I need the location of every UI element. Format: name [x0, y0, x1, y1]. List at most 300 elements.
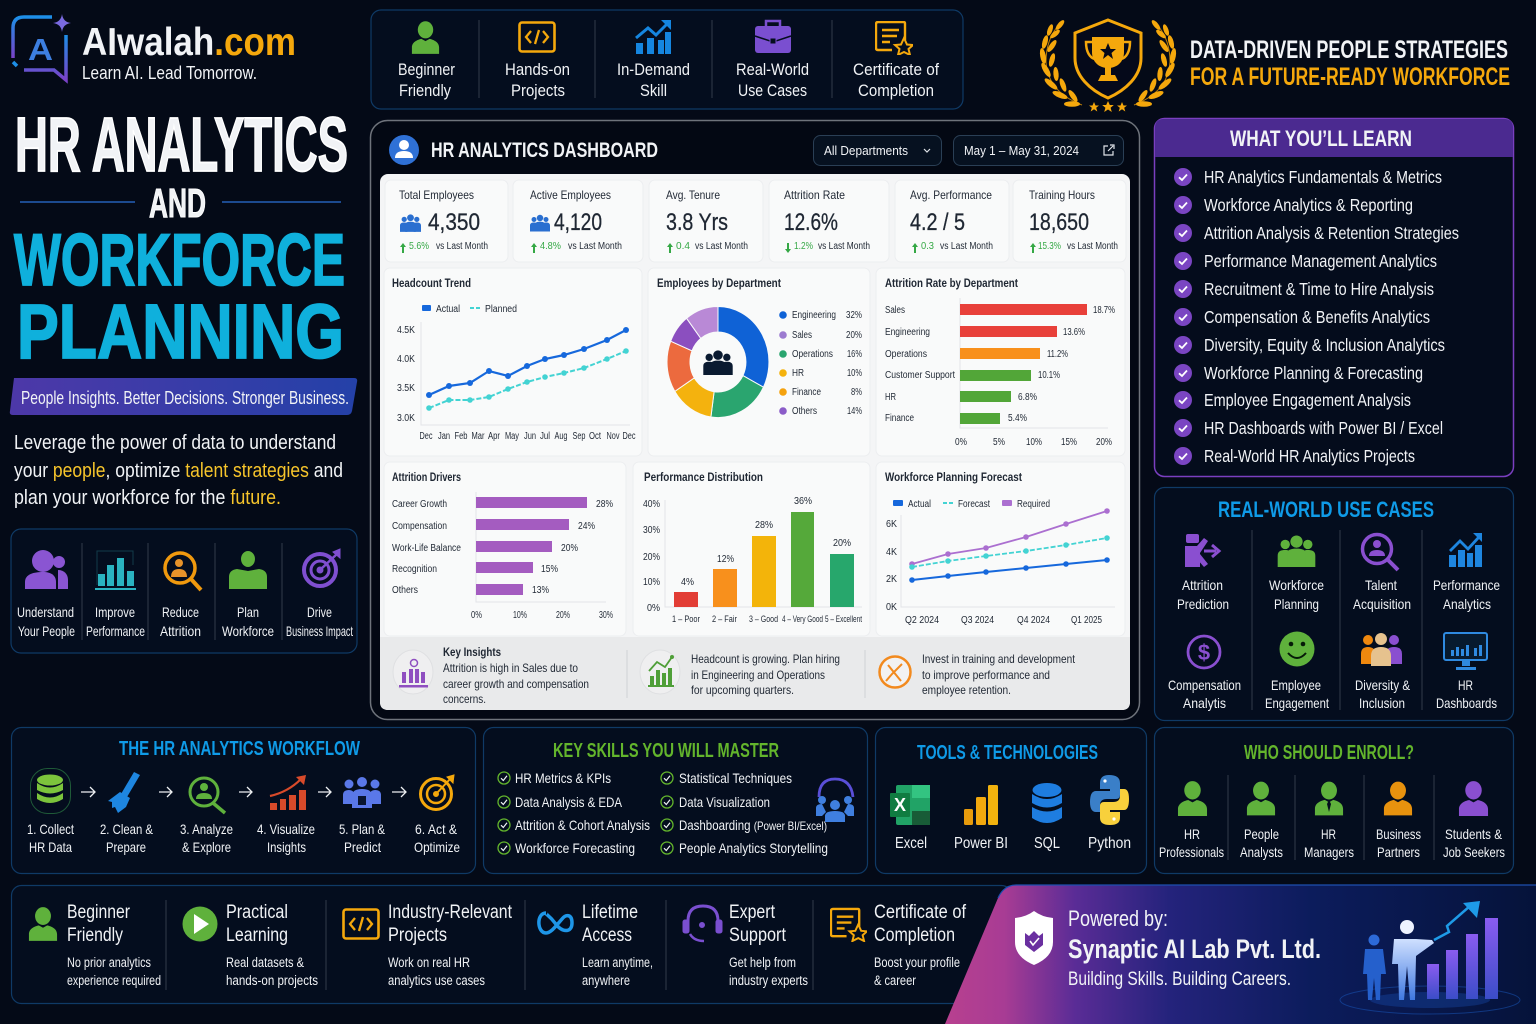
labels: Excel	[895, 835, 927, 852]
icon: logo chat bracket: A	[28, 32, 53, 67]
icon: act target	[420, 775, 454, 810]
labels: Business	[1376, 826, 1421, 842]
chart: attrition drivers: 20%	[556, 610, 570, 621]
KPI: attrition rate: Attrition Rate	[784, 188, 845, 202]
chart: performance distribution: 28%	[755, 520, 773, 531]
chart: headcount trend	[384, 268, 642, 456]
benefit text: Beginner	[67, 902, 131, 923]
labels: 6. Act &	[415, 821, 458, 837]
chart: workforce planning forecast: Q1 2025	[1071, 615, 1102, 626]
icon: trophy	[1086, 37, 1130, 81]
chart: performance distribution: 20%	[643, 552, 660, 563]
chart: headcount trend: Planned	[485, 304, 517, 315]
skill list: Attrition & Cohort Analysis	[515, 817, 650, 833]
labels: Prepare	[106, 839, 146, 855]
chart: attrition drivers: 10%	[513, 610, 527, 621]
banner: powered by: Building Skills. Building Careers.	[1068, 969, 1291, 990]
labels: Power BI	[954, 835, 1008, 852]
KPI: training hours: Training Hours	[1029, 188, 1095, 202]
chart: employees by department: 14%	[847, 406, 862, 417]
icon: plan team	[343, 777, 381, 808]
insight text: headcount: in Engineering and Operations	[691, 668, 825, 682]
icon: certificate	[876, 22, 913, 55]
icon: certificate	[831, 909, 867, 941]
labels: Diversity &	[1355, 677, 1411, 693]
chart: employees by department: Sales	[792, 330, 812, 341]
labels: Acquisition	[1353, 596, 1411, 612]
icon: students	[1459, 781, 1488, 816]
benefit text: Support	[729, 925, 787, 946]
icon: talent search	[1362, 534, 1398, 570]
chart: workforce planning forecast: 6K	[886, 519, 897, 530]
icon: broom	[108, 772, 140, 813]
icon: logo chat bracket	[13, 14, 71, 80]
chart: headcount trend: Sep	[572, 431, 586, 442]
KPI: attrition rate: 1.2%	[794, 240, 813, 252]
chart: headcount trend: Jul	[540, 431, 550, 442]
chart: performance distribution: 30%	[643, 525, 660, 536]
panel: who should enroll	[1154, 728, 1514, 874]
icon: business partners	[1384, 782, 1412, 815]
icon: performance chart	[1449, 533, 1482, 567]
chart: attrition rate by department: 5%	[993, 437, 1005, 448]
icon: beginner	[29, 907, 57, 941]
benefit text: Work on real HR	[388, 955, 470, 970]
KPI: average performance: 0.3	[921, 240, 934, 252]
chart: attrition rate by department: 13.6%	[1063, 327, 1085, 338]
KPI: active employees: vs Last Month	[568, 241, 622, 252]
insight text: headcount	[691, 652, 840, 697]
labels: 2. Clean &	[100, 821, 154, 837]
KPI: average performance: 4.2 / 5	[910, 209, 965, 236]
chart: attrition rate by department: 10%	[1026, 437, 1042, 448]
labels: In-Demand	[617, 60, 690, 79]
company text: Powered by:	[1068, 906, 1168, 931]
benefit text: Boost your profile	[874, 955, 960, 970]
chart: headcount trend: Feb	[454, 431, 468, 442]
heading: REAL-WORLD USE CASES	[1218, 497, 1434, 522]
skill list: People Analytics Storytelling	[679, 840, 828, 856]
chart: headcount trend: Aug	[554, 431, 568, 442]
skill checks	[498, 772, 673, 854]
skill list: Dashboarding (Power BI/Excel)	[679, 817, 827, 833]
labels	[398, 60, 939, 100]
skill list: Data Visualization	[679, 794, 770, 810]
chart: attrition drivers: 30%	[599, 610, 613, 621]
department filter	[814, 136, 942, 166]
brand name: AIwalah.com	[82, 21, 296, 64]
insight text: headcount: for upcoming quarters.	[691, 683, 794, 697]
icon: HR managers	[1315, 782, 1343, 815]
chart: workforce planning forecast: Q3 2024	[961, 615, 994, 626]
chart: employees by department	[648, 268, 870, 456]
checklist: Performance Management Analytics	[1204, 251, 1437, 271]
labels: Analysts	[1240, 844, 1283, 860]
heading: KEY SKILLS YOU WILL MASTER	[553, 740, 779, 762]
logo: AIwalah.com	[13, 14, 296, 83]
panel: course features	[371, 10, 963, 109]
panel: key skills	[484, 728, 868, 874]
labels: Engagement	[1265, 695, 1329, 711]
labels: Certificate of	[853, 60, 939, 79]
benefit text: experience required	[67, 973, 161, 988]
checklist: Attrition Analysis & Retention Strategies	[1204, 223, 1459, 243]
tagline: Learn AI. Lead Tomorrow.	[82, 63, 257, 83]
chart: headcount trend: Headcount Trend	[392, 276, 471, 290]
chart: performance distribution: 2 – Fair	[712, 614, 737, 624]
labels: Business Impact	[286, 623, 353, 639]
heading: TOOLS & TECHNOLOGIES	[917, 742, 1098, 764]
chart: attrition rate by department: 6.8%	[1018, 392, 1037, 403]
icon: briefcase	[755, 21, 791, 53]
icon: Python	[1090, 775, 1129, 825]
icon: people	[25, 550, 68, 589]
chart: employees by department: Operations	[792, 349, 833, 360]
chart: headcount trend: 4.5K	[397, 325, 415, 336]
chart: attrition drivers: 13%	[532, 585, 549, 596]
KPI: total employees: vs Last Month	[436, 241, 488, 252]
heading: THE HR ANALYTICS WORKFLOW	[119, 738, 360, 760]
panel: what you'll learn	[1154, 118, 1514, 476]
benefit text: Get help from	[729, 955, 796, 970]
icon: dashboard avatar	[389, 135, 419, 165]
icon: HR professionals	[1178, 781, 1207, 816]
icon: bar chart	[95, 551, 136, 590]
chart: performance distribution: 1 – Poor	[672, 614, 700, 624]
chart: attrition rate by department: 18.7%	[1093, 305, 1115, 316]
tagline banner: People Insights. Better Decisions. Stronger Business.	[21, 388, 349, 408]
labels: HR	[1458, 677, 1473, 693]
icon: right wreath	[1134, 19, 1177, 107]
intro paragraph: your people, optimize talent strategies and	[14, 460, 343, 482]
chart: attrition drivers: Recognition	[392, 564, 437, 575]
icon: workforce team	[1278, 535, 1315, 567]
date filter	[954, 136, 1124, 166]
icon: compensation: $	[1198, 640, 1210, 665]
benefit text: Learn anytime,	[582, 955, 653, 970]
icon: people analysts	[1247, 782, 1275, 815]
benefit text: Lifetime	[582, 902, 638, 923]
skill list: Workforce Forecasting	[515, 840, 635, 856]
panel: tools and technologies	[876, 728, 1146, 874]
chart: employees by department: Others	[792, 406, 817, 417]
icon: HR dashboard monitor	[1444, 633, 1487, 670]
title: WORKFORCE	[14, 220, 345, 301]
chart: workforce planning forecast: Required	[1017, 499, 1050, 510]
benefit text: Learning	[226, 925, 288, 946]
panel: real-world use cases	[1154, 488, 1514, 720]
KPI: average tenure: vs Last Month	[695, 241, 748, 252]
KPI: attrition rate: 12.6%	[784, 209, 838, 236]
icon: insight growth	[640, 650, 680, 694]
checklist: Diversity, Equity & Inclusion Analytics	[1204, 335, 1445, 355]
KPI: active employees: Active Employees	[530, 188, 611, 202]
labels	[895, 835, 1131, 852]
dashboard canvas	[380, 174, 1130, 710]
icon: engagement smile	[1280, 632, 1314, 666]
labels: Compensation	[1168, 677, 1241, 693]
labels: Planning	[1274, 596, 1319, 612]
icon: Excel: X	[894, 795, 906, 815]
benefit text: Practical	[226, 902, 288, 923]
heading: data-driven people strategies	[1190, 36, 1510, 91]
chart: workforce planning forecast: Forecast	[958, 499, 990, 510]
chart: attrition rate by department: 10.1%	[1038, 370, 1060, 381]
icon: shield	[1015, 911, 1053, 965]
labels: Hands-on	[505, 60, 570, 79]
KPI: attrition rate: vs Last Month	[818, 241, 870, 252]
chart: attrition drivers: Attrition Drivers	[392, 470, 461, 484]
KPI: average tenure: 0.4	[676, 240, 690, 252]
KPI: average performance: Avg. Performance	[910, 188, 992, 202]
icon: code	[520, 22, 554, 52]
icon: magnifier	[165, 553, 201, 590]
chart: employees by department: 32%	[846, 310, 862, 321]
labels: Performance	[86, 623, 145, 639]
labels: Workforce	[1269, 577, 1324, 593]
badge: trophy shield and wreath	[1039, 19, 1177, 112]
chart: attrition drivers: Compensation	[392, 521, 447, 532]
labels: Optimize	[414, 839, 460, 855]
KPI: active employees: 4.8%	[540, 240, 561, 252]
chart: attrition rate by department: Engineering	[885, 327, 930, 338]
labels: Python	[1088, 835, 1131, 852]
labels: Reduce	[162, 604, 199, 620]
labels: Your People	[18, 623, 75, 639]
labels: Projects	[511, 81, 565, 100]
benefit text: hands-on projects	[226, 973, 318, 988]
KPI: average tenure	[649, 180, 763, 262]
icon: stars	[1089, 101, 1127, 112]
icon: insight people	[393, 650, 433, 694]
benefit text: Access	[582, 925, 632, 946]
icon: play	[182, 906, 218, 942]
title: AND	[149, 180, 206, 226]
intro paragraph	[14, 432, 343, 509]
benefit text: Projects	[388, 925, 447, 946]
labels: 4. Visualize	[257, 821, 315, 837]
benefit text: Friendly	[67, 925, 123, 946]
KPI: average performance	[895, 180, 1009, 262]
intro paragraph: Leverage the power of data to understand	[14, 432, 336, 454]
chart: performance distribution: 36%	[794, 496, 812, 507]
checklist: Real-World HR Analytics Projects	[1204, 446, 1415, 466]
labels: HR	[1184, 826, 1200, 842]
icon: infinity	[539, 913, 572, 933]
labels: HR Data	[29, 839, 72, 855]
labels: Workforce	[222, 623, 274, 639]
chart: headcount trend: 4.0K	[397, 354, 415, 365]
insight text: headcount: Headcount is growing. Plan hiring	[691, 652, 840, 666]
labels: Skill	[640, 81, 667, 100]
insight text: attrition: career growth and compensation	[443, 677, 589, 691]
icon: code	[344, 910, 378, 938]
labels: Job Seekers	[1443, 844, 1505, 860]
chart: attrition rate by department: 11.2%	[1047, 349, 1068, 360]
benefit text: anywhere	[582, 973, 630, 988]
labels: Professionals	[1159, 844, 1224, 860]
panel: workflow	[12, 728, 476, 874]
chart: employees by department: HR	[792, 368, 804, 379]
labels: Managers	[1304, 844, 1354, 860]
labels: Inclusion	[1359, 695, 1405, 711]
labels: Completion	[858, 81, 934, 100]
benefit text: Real datasets &	[226, 955, 304, 970]
benefit text: industry experts	[729, 973, 808, 988]
chart: attrition rate by department: Customer Support	[885, 370, 955, 381]
icon: beginner	[412, 21, 439, 54]
checklist: Recruitment & Time to Hire Analysis	[1204, 279, 1434, 299]
KPI: average tenure: 3.8 Yrs	[666, 209, 728, 236]
chart: headcount trend: Mar	[472, 431, 485, 442]
banner: powered by: Synaptic AI Lab Pvt. Ltd.	[1068, 934, 1321, 964]
tagline banner	[10, 378, 357, 415]
labels	[1159, 826, 1505, 860]
chart: attrition drivers: 20%	[561, 543, 578, 554]
benefit text: & career	[874, 973, 916, 988]
chart: performance distribution: 40%	[643, 499, 660, 510]
KPI: active employees: 4,120	[554, 209, 602, 236]
chart: headcount trend: Dec	[622, 431, 636, 442]
chart: headcount trend: Actual	[436, 304, 460, 315]
title: HR ANALYTICS	[15, 102, 348, 188]
labels: Plan	[237, 604, 259, 620]
labels: Partners	[1377, 844, 1420, 860]
insight text: training: Invest in training and development	[922, 652, 1076, 666]
chart: attrition rate by department: 15%	[1061, 437, 1077, 448]
labels: Understand	[17, 604, 74, 620]
checklist: Workforce Analytics & Reporting	[1204, 195, 1413, 215]
KPI: training hours: vs Last Month	[1067, 241, 1118, 252]
labels: Dashboards	[1436, 695, 1497, 711]
labels: Talent	[1365, 577, 1397, 593]
icon: target	[304, 549, 340, 586]
chart: headcount trend: Jan	[438, 431, 450, 442]
labels: People	[1244, 826, 1279, 842]
chart: attrition rate by department: HR	[885, 392, 896, 403]
chart: attrition drivers: 15%	[541, 564, 558, 575]
chart: attrition drivers: Work-Life Balance	[392, 543, 461, 554]
benefit text: Expert	[729, 902, 776, 923]
chart: performance distribution	[633, 462, 870, 636]
heading: WHAT YOU’LL LEARN	[1230, 126, 1412, 151]
chart: performance distribution: Performance Distribution	[644, 470, 763, 484]
insight text: attrition	[443, 645, 589, 706]
insight text: attrition: Attrition is high in Sales due to	[443, 661, 578, 675]
labels: Analytics	[1443, 596, 1491, 612]
labels: Drive	[307, 604, 332, 620]
arrows	[81, 787, 406, 797]
labels: Use Cases	[738, 81, 807, 100]
labels	[1168, 577, 1500, 711]
KPI: active employees	[513, 180, 643, 262]
labels: Improve	[95, 604, 135, 620]
donut chart	[667, 306, 769, 418]
panel: benefits	[11, 529, 357, 653]
icon: diversity	[1361, 633, 1402, 666]
insight text: training	[922, 652, 1076, 697]
panel: course benefits strip	[12, 886, 1012, 1004]
labels: Attrition	[1182, 577, 1223, 593]
checklist: HR Analytics Fundamentals & Metrics	[1204, 167, 1442, 187]
chart: employees by department: 8%	[851, 387, 862, 398]
labels: HR	[1321, 826, 1336, 842]
checklist: HR Dashboards with Power BI / Excel	[1204, 418, 1443, 438]
labels: Students &	[1445, 826, 1503, 842]
icon: demand chart	[636, 20, 671, 54]
icon: left wreath	[1039, 19, 1082, 107]
KPI: attrition rate	[769, 180, 889, 262]
insight text: attrition: concerns.	[443, 692, 486, 706]
panel: HR analytics dashboard	[370, 120, 1140, 720]
icon: Power BI	[964, 785, 998, 825]
chart: workforce planning forecast: 0K	[886, 602, 897, 613]
labels	[17, 604, 353, 639]
intro paragraph: plan your workforce for the future.	[14, 487, 281, 509]
chart: attrition rate by department: Sales	[885, 305, 905, 316]
labels: Friendly	[399, 81, 451, 100]
chart: headcount trend: Apr	[488, 431, 501, 442]
icon: attrition prediction	[1185, 534, 1219, 567]
skill list: HR Metrics & KPIs	[515, 770, 611, 786]
chart: performance distribution: 20%	[833, 538, 851, 549]
icon: analyze magnifier	[190, 778, 225, 813]
chart: attrition drivers: Others	[392, 585, 418, 596]
insight text: training: to improve performance and	[922, 668, 1050, 682]
KPI: average tenure: Avg. Tenure	[666, 188, 720, 202]
chart: attrition rate by department: Finance	[885, 413, 914, 424]
labels: Beginner	[398, 60, 455, 79]
labels: & Explore	[182, 839, 231, 855]
icon: insight training	[880, 656, 910, 688]
chart: attrition rate by department: Attrition Rate by Department	[885, 276, 1018, 290]
chart: performance distribution: 10%	[643, 577, 660, 588]
checklist: Workforce Planning & Forecasting	[1204, 363, 1423, 383]
chart: attrition rate by department: 20%	[1096, 437, 1112, 448]
illustration: people and growth chart	[1340, 901, 1520, 1014]
title: PLANNING	[17, 289, 344, 375]
benefit text: analytics use cases	[388, 973, 485, 988]
benefit text: Completion	[874, 925, 955, 946]
department filter: All Departments	[824, 143, 908, 158]
chart: workforce planning forecast: Actual	[908, 499, 931, 510]
benefit text: No prior analytics	[67, 955, 151, 970]
skill list: Data Analysis & EDA	[515, 794, 623, 810]
chart: attrition drivers: 28%	[596, 499, 613, 510]
chart: headcount trend: Oct	[589, 431, 601, 442]
icon: Excel	[890, 785, 930, 825]
KPI: training hours: 15.3%	[1038, 240, 1061, 252]
KPI: average performance: vs Last Month	[940, 241, 993, 252]
labels: Analytis	[1183, 695, 1226, 711]
chart: employees by department: Engineering	[792, 310, 836, 321]
chart: performance distribution: 3 – Good	[749, 614, 778, 624]
chart: attrition drivers: 0%	[471, 610, 482, 621]
benefit text: Certificate of	[874, 902, 967, 923]
labels: Insights	[267, 839, 306, 855]
icon: team in donut	[703, 350, 733, 375]
KPI: training hours	[1013, 180, 1126, 262]
chart: workforce planning forecast	[876, 462, 1125, 636]
banner: powered by	[945, 885, 1536, 1024]
panel: key insights	[380, 637, 1130, 710]
date filter: May 1 – May 31, 2024	[964, 143, 1079, 158]
dashboard heading: HR ANALYTICS DASHBOARD	[431, 139, 658, 162]
labels: 3. Analyze	[180, 821, 233, 837]
KPI: total employees: Total Employees	[399, 188, 474, 202]
checklist: Compensation & Benefits Analytics	[1204, 307, 1430, 327]
icon: compensation	[1188, 636, 1220, 668]
